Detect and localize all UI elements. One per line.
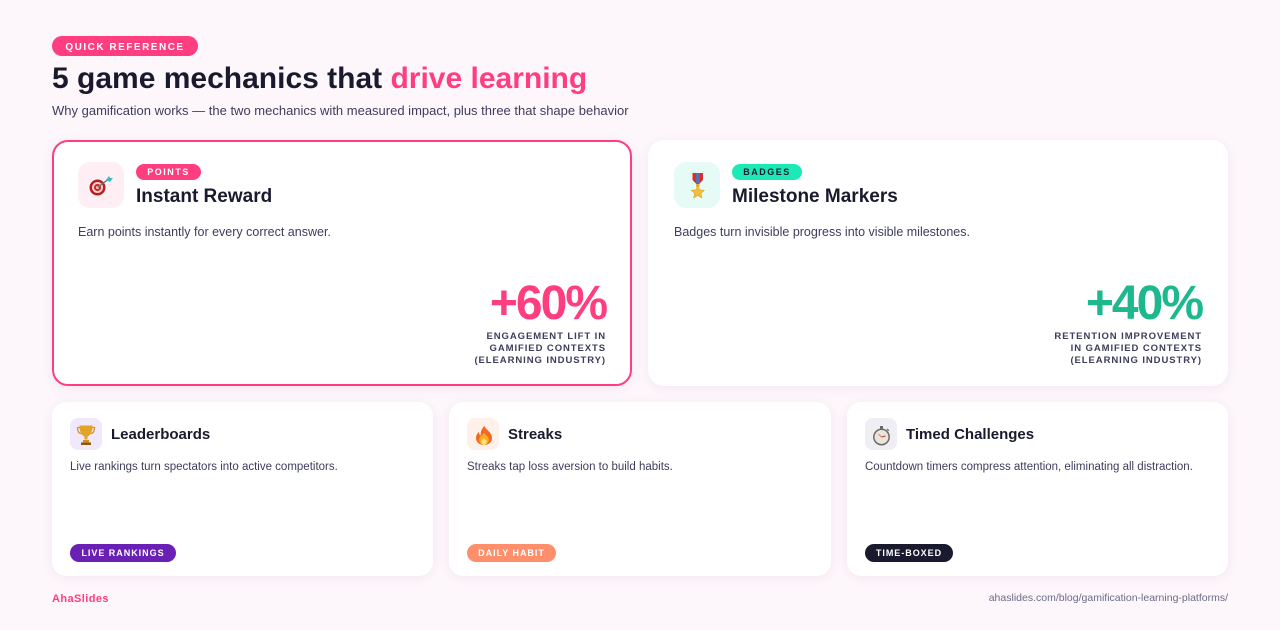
heading: leaderboards: Leaderboards [111,426,210,443]
tag: points: POINTS [147,167,190,177]
icon: medal [674,162,720,208]
stat label: RETENTION IMPROVEMENT [1054,331,1202,342]
tag: points [136,164,201,180]
panel: points [52,140,632,386]
title: 5 game mechanics that drive learning [52,62,587,95]
subtitle: Why gamification works — the two mechanics with measured impact, plus three that shape behavior [52,103,629,118]
tag: time-boxed [865,544,953,562]
stat label: IN GAMIFIED CONTEXTS [1071,343,1202,354]
tag: live rankings [70,544,176,562]
panel: badges [648,140,1228,386]
stat label: (ELEARNING INDUSTRY) [1070,355,1202,366]
tag: time-boxed: TIME-BOXED [876,548,942,558]
stat: +60%: +60% [490,277,606,330]
heading: milestone markers: Milestone Markers [732,186,898,207]
stat label: (ELEARNING INDUSTRY) [474,355,606,366]
stat label: ENGAGEMENT LIFT IN [487,331,606,342]
description: Countdown timers compress attention, eliminating all distraction. [865,461,1193,473]
tag: badges [732,164,802,180]
stat label: GAMIFIED CONTEXTS [490,343,606,354]
description: Streaks tap loss aversion to build habits. [467,461,673,473]
tag: daily habit [467,544,556,562]
panel: timed challenges [847,402,1228,576]
tag: badges: BADGES [743,167,791,177]
icon: dart target [78,162,124,208]
tag: daily habit: DAILY HABIT [478,548,545,558]
stat label [1054,331,1202,366]
icon: fire [467,418,499,450]
description: Earn points instantly for every correct answer. [78,225,331,239]
panel: leaderboards [52,402,433,576]
heading: instant reward: Instant Reward [136,186,272,207]
heading: timed challenges: Timed Challenges [906,426,1034,443]
heading: streaks: Streaks [508,426,562,443]
description: Live rankings turn spectators into active competitors. [70,461,338,473]
icon: stopwatch [865,418,897,450]
stat: +40%: +40% [1086,277,1202,330]
panel: streaks [449,402,831,576]
stat label [474,331,606,366]
badge: quick reference [52,36,198,56]
tag: live rankings: LIVE RANKINGS [81,548,165,558]
footer source url: ahaslides.com/blog/gamification-learning-platforms/ [989,592,1228,604]
footer brand: AhaSlides [52,593,109,605]
description: Badges turn invisible progress into visible milestones. [674,225,970,239]
badge: quick reference: QUICK REFERENCE [65,42,185,53]
icon: trophy [70,418,102,450]
